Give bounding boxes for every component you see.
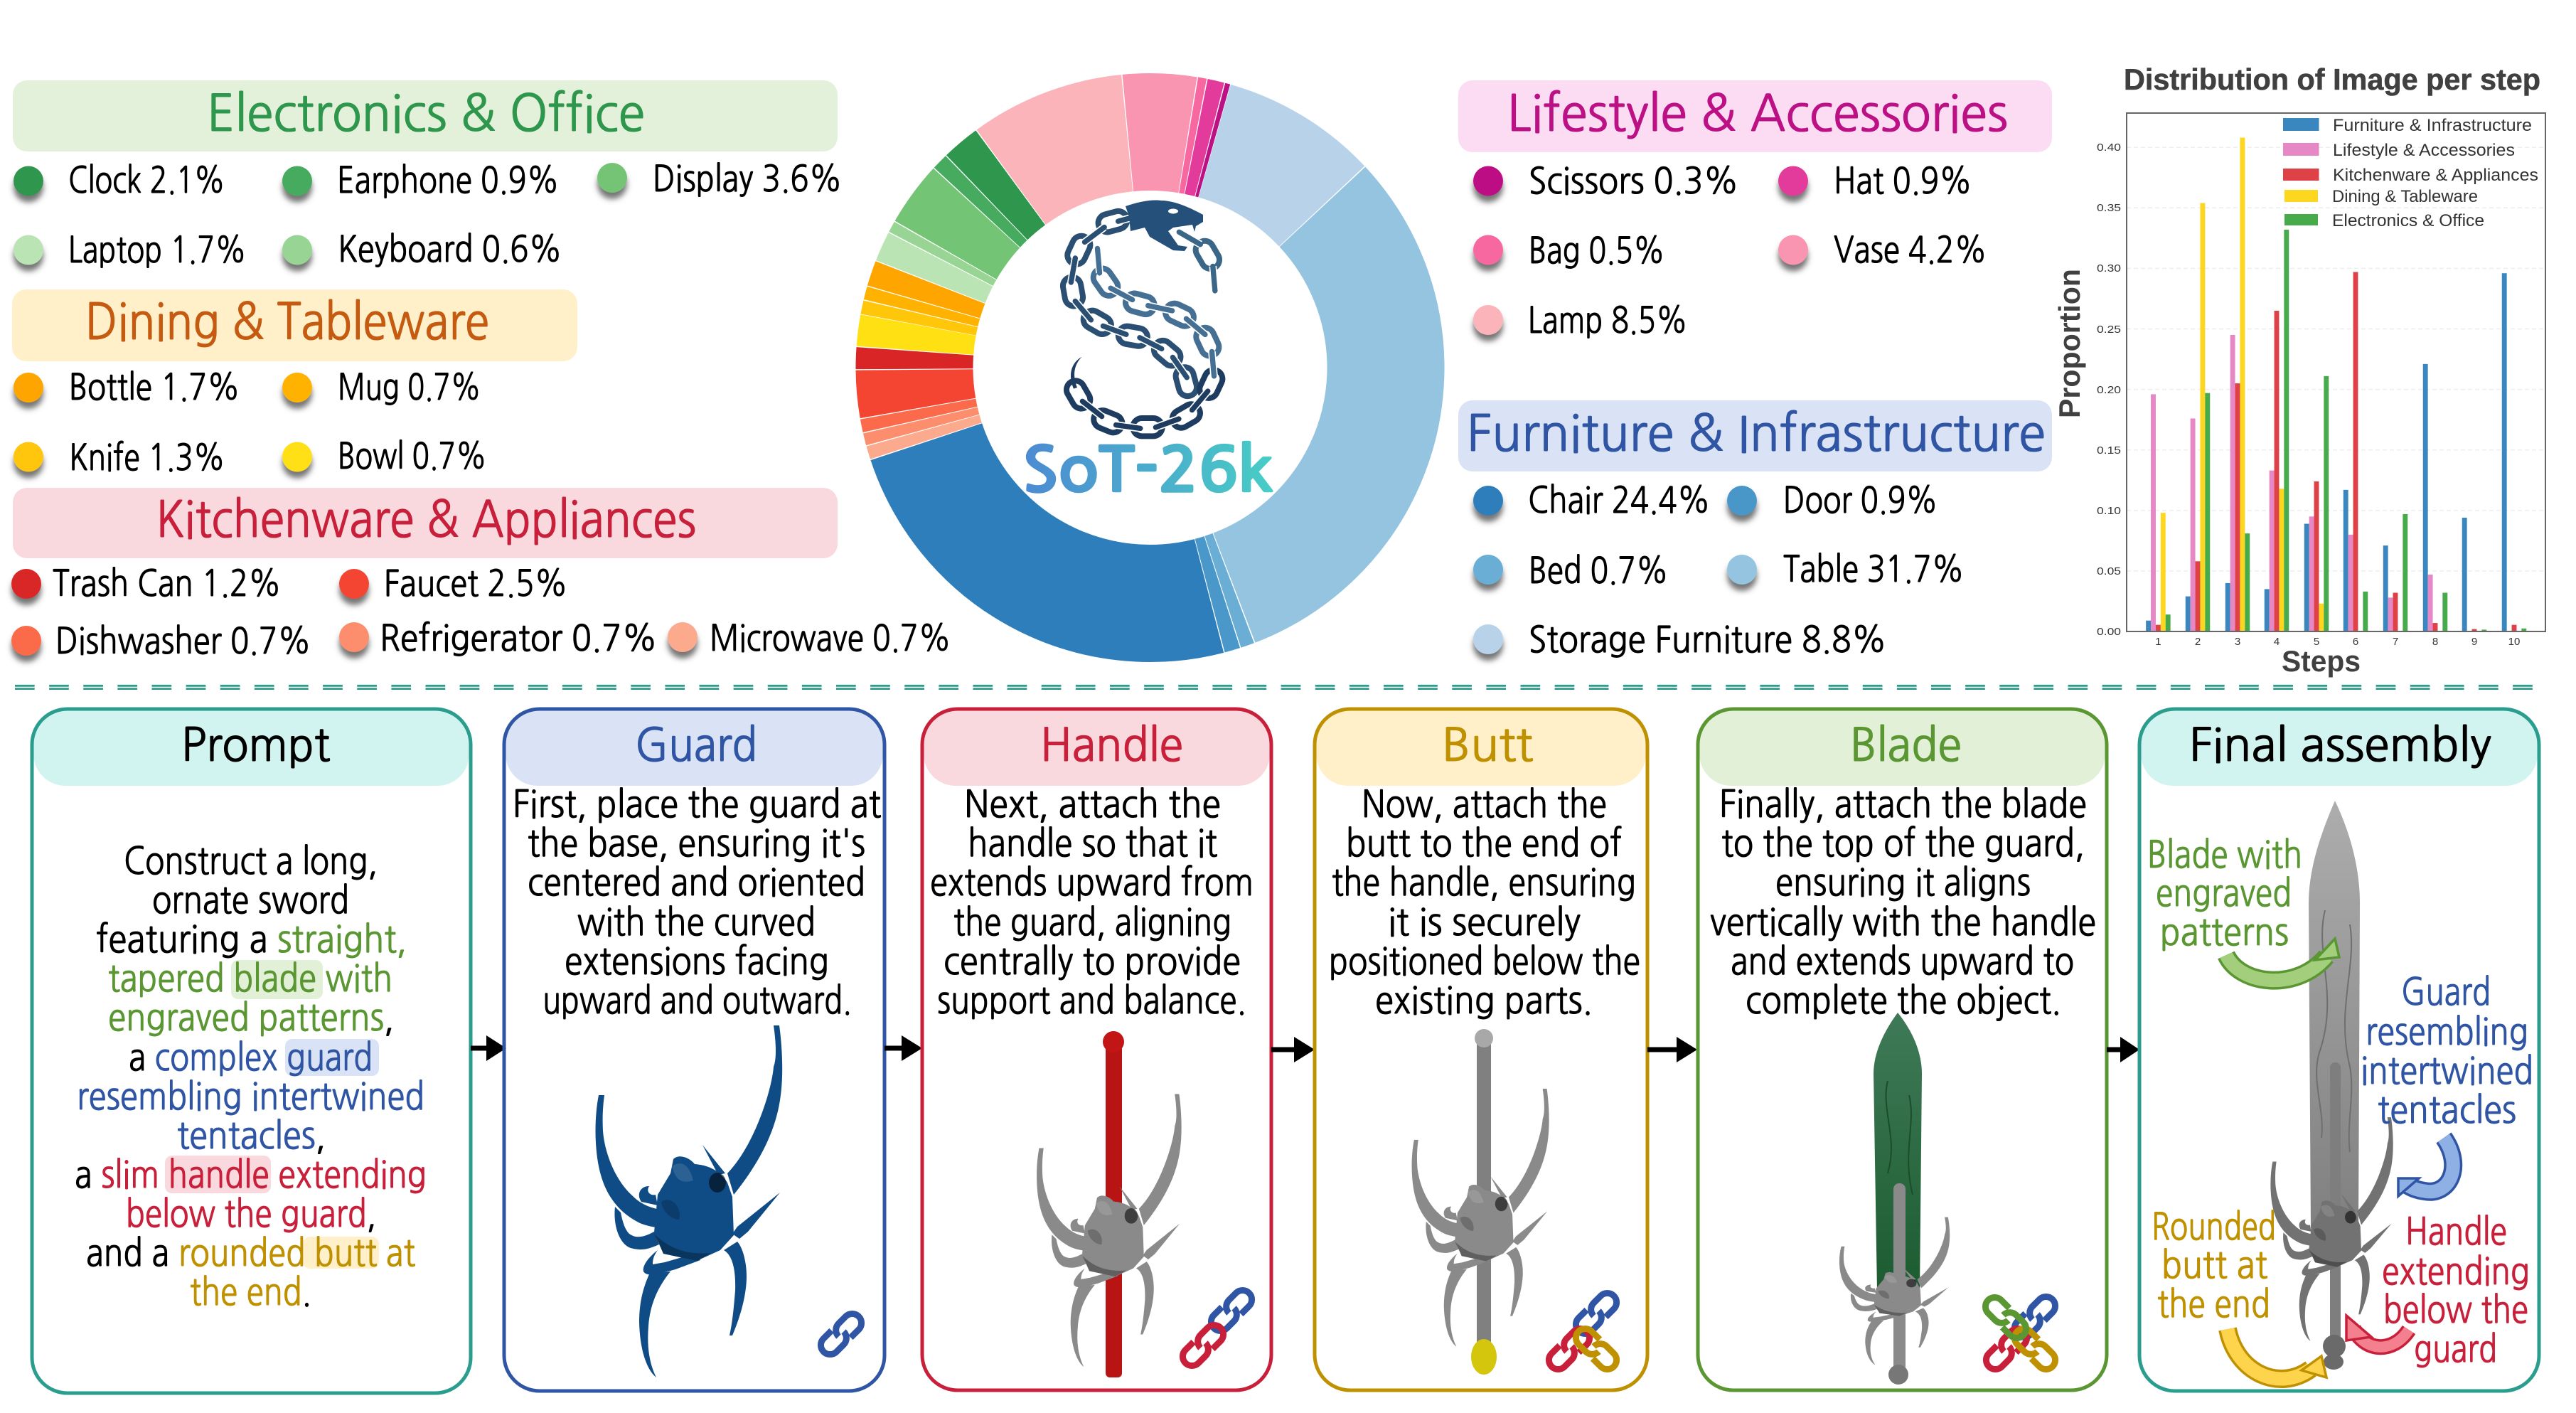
item: Scissors: Scissors 0.3% bbox=[1529, 164, 1739, 199]
handle description: support and balance. bbox=[937, 982, 1246, 1019]
y axis title: Proportion bbox=[2053, 269, 2086, 418]
header: Kitchenware & Appliances: Kitchenware & Appliances bbox=[156, 495, 696, 545]
item: Keyboard: Keyboard 0.6% bbox=[338, 232, 562, 267]
annotation: guard: intertwined bbox=[2361, 1052, 2533, 1089]
bars bbox=[2146, 138, 2526, 631]
blade description: Finally, attach the blade bbox=[1719, 786, 2087, 823]
panel: Final assembly bbox=[2139, 709, 2539, 1391]
handle description: extends upward from bbox=[930, 864, 1254, 901]
y axis labels: 0.15 bbox=[2097, 444, 2121, 457]
guard description: centered and oriented bbox=[528, 864, 865, 901]
annotation: butt: the end bbox=[2157, 1286, 2270, 1323]
item: Clock bbox=[14, 163, 225, 198]
heading: Prompt: Prompt bbox=[181, 723, 330, 768]
item: Faucet: Faucet 2.5% bbox=[384, 566, 568, 602]
panel: Prompt bbox=[32, 709, 471, 1393]
blade description: vertically with the handle bbox=[1710, 904, 2096, 941]
y axis labels: 0.40 bbox=[2097, 142, 2121, 154]
item: Vase: Vase 4.2% bbox=[1834, 233, 1987, 268]
butt description: existing parts. bbox=[1375, 982, 1593, 1019]
blade description: complete the object. bbox=[1746, 982, 2061, 1020]
x axis labels: 2 bbox=[2195, 636, 2201, 648]
x axis labels: 10 bbox=[2508, 636, 2520, 648]
arrow: guard to handle bbox=[885, 1035, 922, 1061]
x axis labels: 6 bbox=[2353, 636, 2358, 648]
x axis labels: 7 bbox=[2393, 636, 2398, 648]
legend: Dining & Tableware bbox=[12, 289, 577, 476]
3D render: gray sword base with yellow butt bbox=[1412, 1029, 1549, 1375]
header: Furniture & Infrastructure bbox=[1458, 400, 2052, 471]
blade description: and extends upward to bbox=[1731, 943, 2074, 980]
header: Dining & Tableware bbox=[12, 289, 577, 361]
x axis labels bbox=[2155, 636, 2520, 648]
3D render: assembled gray sword bbox=[2270, 801, 2393, 1370]
prompt highlights bbox=[165, 960, 379, 1269]
donut chart bbox=[817, 34, 1483, 701]
annotation: handle: Handle bbox=[2405, 1213, 2507, 1250]
chart legend: Dining & Tableware bbox=[2332, 187, 2478, 206]
annotation: butt bbox=[2152, 1208, 2276, 1323]
chart legend: Electronics & Office bbox=[2332, 211, 2484, 230]
handle description bbox=[930, 786, 1254, 1019]
prompt text bbox=[75, 843, 427, 1311]
item: Bottle: Bottle 1.7% bbox=[69, 370, 240, 405]
item: Display: Display 3.6% bbox=[653, 161, 843, 197]
panel: Guard bbox=[504, 709, 885, 1391]
prompt text: below the guard, bbox=[126, 1195, 376, 1232]
annotation: guard bbox=[2361, 974, 2533, 1129]
x axis labels: 9 bbox=[2471, 636, 2477, 648]
arrow: blue curved bbox=[2398, 1138, 2453, 1196]
item: Door bbox=[1727, 483, 1938, 518]
annotation: guard: Guard bbox=[2401, 974, 2491, 1011]
item: Earphone: Earphone 0.9% bbox=[337, 163, 560, 198]
x axis labels: 3 bbox=[2235, 636, 2240, 648]
header: Kitchenware & Appliances bbox=[13, 488, 838, 558]
header: Electronics & Office bbox=[13, 80, 838, 151]
item: Mug bbox=[282, 370, 481, 405]
prompt text: ornate sword bbox=[152, 882, 349, 919]
blade description: to the top of the guard, bbox=[1721, 825, 2085, 862]
annotation: butt: Rounded bbox=[2152, 1208, 2276, 1245]
header: Lifestyle & Accessories: Lifestyle & Accessories bbox=[1507, 89, 2008, 139]
guard description: the base, ensuring it's bbox=[528, 825, 865, 862]
y axis labels: 0.05 bbox=[2097, 565, 2121, 577]
x axis labels: 8 bbox=[2432, 636, 2438, 648]
prompt text: resembling intertwined bbox=[77, 1078, 424, 1115]
prompt text: a complex guard bbox=[129, 1039, 373, 1076]
item: Laptop: Laptop 1.7% bbox=[68, 233, 247, 268]
item: Knife: Knife 1.3% bbox=[69, 440, 225, 476]
item: Table: Table 31.7% bbox=[1783, 552, 1965, 587]
item: Bag: Bag 0.5% bbox=[1529, 233, 1665, 269]
prompt text: tentacles, bbox=[177, 1117, 326, 1154]
arrow: prompt to guard bbox=[471, 1035, 506, 1061]
item: Storage Furniture: Storage Furniture 8.8% bbox=[1529, 622, 1887, 658]
icon: blue and red chain links bbox=[1179, 1286, 1256, 1370]
item: Laptop bbox=[14, 233, 247, 268]
panel: Butt bbox=[1315, 709, 1647, 1390]
panel: Handle bbox=[922, 709, 1271, 1390]
guard description bbox=[513, 786, 881, 1019]
annotation: butt: butt at bbox=[2161, 1247, 2267, 1284]
annotation: guard: tentacles bbox=[2378, 1092, 2516, 1129]
butt description: Now, attach the bbox=[1362, 786, 1607, 823]
legend: Lifestyle & Accessories bbox=[1458, 80, 2052, 338]
header: Lifestyle & Accessories bbox=[1458, 80, 2052, 152]
guard description: extensions facing bbox=[565, 943, 829, 980]
item: Microwave: Microwave 0.7% bbox=[710, 621, 951, 656]
3D render: green blade with gray guard bbox=[1839, 1013, 1950, 1385]
item: Door: Door 0.9% bbox=[1783, 483, 1938, 518]
heading: Final assembly: Final assembly bbox=[2189, 723, 2491, 768]
annotation: handle: guard bbox=[2414, 1331, 2497, 1367]
bar chart: distribution of image per step bbox=[2053, 63, 2545, 678]
x axis title: Steps bbox=[2282, 644, 2361, 678]
handle description: the guard, aligning bbox=[953, 904, 1231, 941]
annotation: handle: extending bbox=[2382, 1253, 2530, 1290]
arrow: yellow curved bbox=[2228, 1329, 2326, 1379]
item: Lamp: Lamp 8.5% bbox=[1528, 303, 1688, 338]
legend: Furniture & Infrastructure bbox=[1458, 400, 2052, 658]
chart title: Distribution of Image per step bbox=[2124, 63, 2540, 96]
chart legend bbox=[2283, 116, 2538, 230]
item: Bed: Bed 0.7% bbox=[1529, 553, 1669, 589]
arrow: blade to final assembly bbox=[2107, 1037, 2139, 1062]
prompt text: tapered blade with bbox=[108, 960, 392, 997]
header: Dining & Tableware: Dining & Tableware bbox=[85, 297, 489, 347]
prompt text: Construct a long, bbox=[124, 843, 378, 880]
heading: Butt: Butt bbox=[1442, 723, 1533, 768]
arrow: red curved bbox=[2346, 1316, 2409, 1347]
x axis labels: 5 bbox=[2314, 636, 2319, 648]
handle description: Next, attach the bbox=[964, 786, 1221, 823]
item: Chair bbox=[1473, 483, 1711, 518]
prompt text: and a rounded butt at bbox=[86, 1235, 415, 1271]
icon: blue chain link bbox=[817, 1310, 865, 1358]
logo: chain snake S bbox=[1062, 200, 1226, 436]
item: Mug: Mug 0.7% bbox=[338, 370, 481, 405]
item: Lamp bbox=[1473, 303, 1688, 338]
legend: Kitchenware & Appliances bbox=[11, 488, 951, 659]
annotation: handle: below the bbox=[2383, 1291, 2528, 1328]
butt description bbox=[1329, 786, 1640, 1019]
x axis labels: 4 bbox=[2274, 636, 2280, 648]
arrow: handle to butt bbox=[1271, 1037, 1315, 1062]
blade description bbox=[1710, 786, 2096, 1020]
butt description: the handle, ensuring bbox=[1332, 864, 1636, 901]
item: Vase bbox=[1778, 233, 1987, 268]
prompt text: featuring a straight, bbox=[96, 921, 407, 958]
y axis labels: 0.00 bbox=[2097, 626, 2121, 638]
3D render: red handle with gray guard bbox=[1037, 1031, 1182, 1377]
chart legend: Lifestyle & Accessories bbox=[2333, 141, 2515, 160]
annotation: blade: patterns bbox=[2160, 914, 2289, 951]
y axis labels: 0.35 bbox=[2097, 202, 2121, 214]
prompt text: the end. bbox=[190, 1274, 311, 1311]
prompt text: engraved patterns, bbox=[108, 999, 394, 1036]
item: Hat bbox=[1778, 164, 1972, 199]
chart legend: Furniture & Infrastructure bbox=[2333, 116, 2532, 135]
item: Trash Can: Trash Can 1.2% bbox=[53, 566, 282, 602]
item: Chair: Chair 24.4% bbox=[1528, 483, 1711, 518]
item: Bed bbox=[1473, 553, 1669, 589]
item: Bottle bbox=[14, 370, 240, 405]
x axis labels: 1 bbox=[2155, 636, 2161, 648]
annotation: guard: resembling bbox=[2366, 1013, 2528, 1050]
item: Display bbox=[597, 161, 843, 197]
y axis labels: 0.10 bbox=[2097, 505, 2121, 517]
y axis labels: 0.25 bbox=[2097, 324, 2121, 336]
logo text: SoT-26k: SoT-26k bbox=[1022, 440, 1273, 501]
item: Bag bbox=[1473, 233, 1665, 269]
heading: Blade: Blade bbox=[1850, 723, 1962, 768]
icon: four chain links bbox=[1982, 1293, 2059, 1373]
butt description: positioned below the bbox=[1329, 943, 1640, 980]
y axis labels: 0.30 bbox=[2097, 262, 2121, 274]
y axis labels: 0.20 bbox=[2097, 384, 2121, 396]
butt description: butt to the end of bbox=[1346, 825, 1622, 862]
arrow: green curved bbox=[2226, 939, 2339, 981]
header: Furniture & Infrastructure: Furniture & Infrastructure bbox=[1467, 409, 2046, 459]
icon: blue, red and yellow chain links bbox=[1545, 1289, 1620, 1373]
guard description: with the curved bbox=[577, 904, 816, 941]
item: Knife bbox=[14, 440, 225, 476]
annotation: handle bbox=[2382, 1213, 2530, 1367]
item: Bowl: Bowl 0.7% bbox=[338, 439, 487, 474]
item: Refrigerator: Refrigerator 0.7% bbox=[380, 621, 658, 656]
heading: Guard: Guard bbox=[635, 723, 757, 768]
item: Hat: Hat 0.9% bbox=[1834, 164, 1972, 199]
item: Table bbox=[1727, 552, 1965, 587]
guard description: upward and outward. bbox=[543, 982, 852, 1019]
panel: Blade bbox=[1698, 709, 2107, 1390]
header: Electronics & Office: Electronics & Office bbox=[207, 89, 645, 139]
item: Dishwasher: Dishwasher 0.7% bbox=[55, 624, 311, 659]
3D render: blue guard bbox=[596, 1025, 782, 1377]
annotation: blade: engraved bbox=[2156, 875, 2292, 912]
chart legend: Kitchenware & Appliances bbox=[2333, 166, 2538, 185]
legend: Electronics & Office bbox=[13, 80, 843, 268]
arrow: butt to blade bbox=[1647, 1037, 1697, 1062]
handle description: handle so that it bbox=[968, 825, 1217, 862]
annotation: blade: Blade with bbox=[2147, 836, 2302, 873]
blade description: ensuring it aligns bbox=[1775, 864, 2031, 901]
heading: Handle: Handle bbox=[1040, 723, 1183, 768]
butt description: it is securely bbox=[1388, 904, 1581, 941]
y axis labels bbox=[2097, 142, 2121, 638]
item: Clock: Clock 2.1% bbox=[68, 163, 225, 198]
guard description: First, place the guard at bbox=[513, 786, 881, 823]
item: Bowl bbox=[282, 439, 487, 474]
handle description: centrally to provide bbox=[944, 943, 1241, 980]
annotation: blade bbox=[2147, 836, 2302, 951]
prompt text: a slim handle extending bbox=[75, 1156, 427, 1193]
